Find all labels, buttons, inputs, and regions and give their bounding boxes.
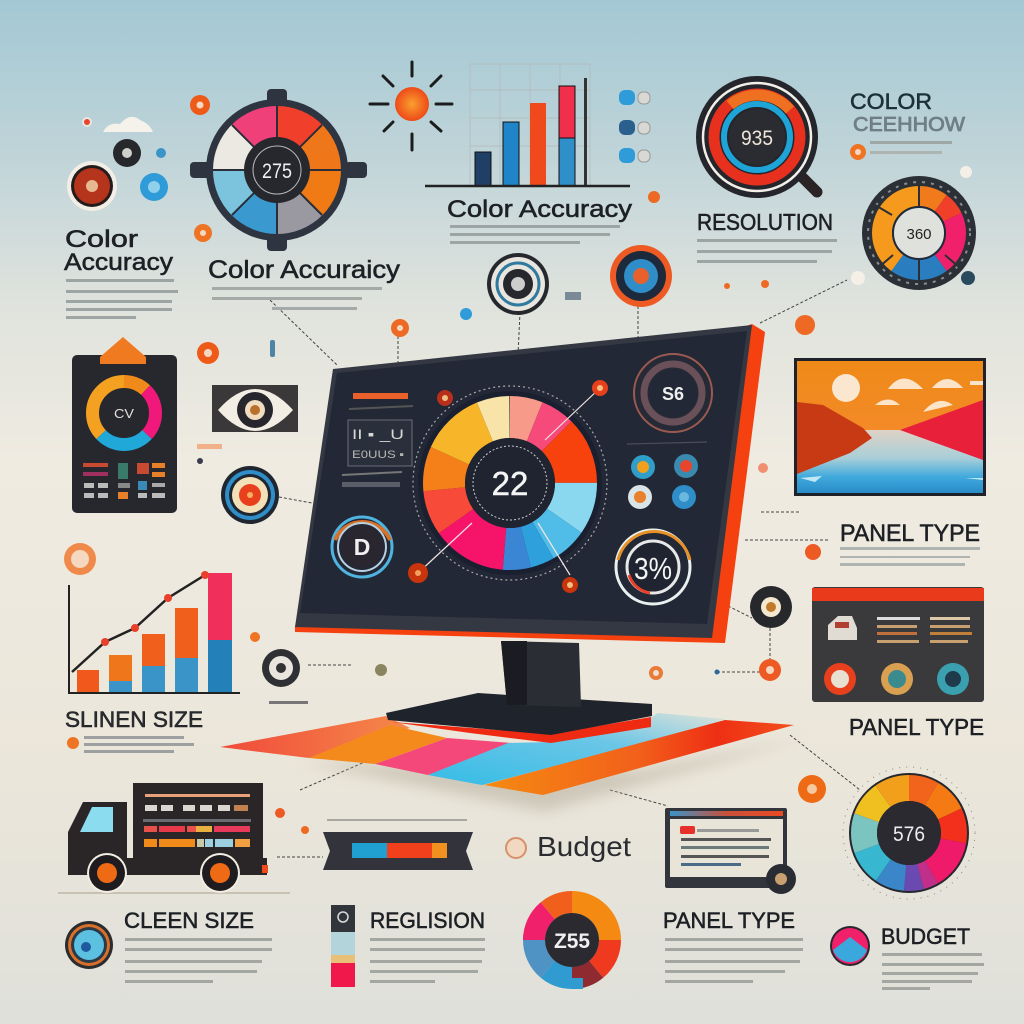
eye icon xyxy=(212,385,298,432)
heading: color accuracy left: Accuracy xyxy=(64,249,173,276)
monitor screen xyxy=(300,331,747,624)
headings top right xyxy=(850,89,965,160)
landscape card xyxy=(794,358,986,496)
cloud icon xyxy=(103,117,153,132)
caption: screen size xyxy=(67,736,194,753)
pie number: 22 xyxy=(492,465,528,502)
heading: panel type lower: PANEL TYPE xyxy=(849,714,984,740)
gauge number: S6 xyxy=(662,384,684,404)
heading: color accuracy top: Color Accuracy xyxy=(447,196,632,223)
bar chart top xyxy=(425,64,630,186)
progress banner xyxy=(275,808,473,870)
desk mat xyxy=(220,713,794,795)
headings top right: COLOR xyxy=(850,89,932,114)
monitor stand xyxy=(501,641,581,707)
small icons left of stand xyxy=(250,632,387,704)
card glyph: CV xyxy=(114,406,134,421)
donut top right xyxy=(862,176,976,290)
marker: panel type upper xyxy=(805,544,821,560)
monitor xyxy=(295,324,765,643)
small streak marks xyxy=(197,444,768,473)
monitor bezel xyxy=(295,324,765,643)
caption: resolution xyxy=(697,239,837,263)
screen gauge lower left xyxy=(332,517,392,577)
bottom donut xyxy=(534,902,610,978)
heading: budget center: Budget xyxy=(537,831,631,862)
bottom item: panel type: PANEL TYPE xyxy=(663,908,795,933)
truck icon xyxy=(58,783,290,893)
gauge wheel top left xyxy=(190,89,367,251)
small icons top left xyxy=(67,95,212,242)
donut number: 360 xyxy=(906,226,932,243)
sun icon xyxy=(370,62,452,150)
bottom item: budget: BUDGET xyxy=(881,924,970,949)
screen divider xyxy=(627,442,707,444)
wheel number: 576 xyxy=(893,823,925,846)
heading: panel type upper: PANEL TYPE xyxy=(840,520,980,547)
main pie xyxy=(413,386,607,580)
donut number: Z55 xyxy=(554,930,590,953)
screen header and table: II ▪ _U xyxy=(352,426,404,442)
small dot near wheel xyxy=(798,775,826,803)
caption: color accuracy top xyxy=(450,225,620,244)
screen header and table: E0UUS ▪ xyxy=(352,449,404,461)
monitor base xyxy=(386,693,652,743)
round icons above monitor xyxy=(197,245,815,364)
icon badge above chart xyxy=(64,543,96,575)
monitor frame xyxy=(295,325,752,638)
round icon right xyxy=(649,586,792,681)
mat shadow xyxy=(300,738,805,812)
heading: color accuracy left xyxy=(64,226,173,276)
connector lines xyxy=(270,280,860,857)
screen dots xyxy=(408,380,698,593)
bottom item: screen size xyxy=(65,908,272,983)
headings top right: CEEHHOW xyxy=(853,114,965,136)
screen gauge upper right xyxy=(634,354,712,432)
bottom item: budget xyxy=(830,924,984,990)
mini icons right of bar chart xyxy=(619,90,660,203)
color wheel bottom right xyxy=(843,767,975,899)
caption: color accuracy left xyxy=(66,279,178,319)
target gauge top right xyxy=(696,76,818,198)
heading: screen size: SLINEN SIZE xyxy=(65,707,203,732)
screen gauge lower right xyxy=(616,530,690,604)
screen card bottom xyxy=(665,808,796,894)
caption: color accuracy center xyxy=(212,287,382,310)
gauge number: 935 xyxy=(741,127,773,150)
dots near donut xyxy=(724,166,975,289)
line and bar chart left xyxy=(69,571,240,693)
caption: panel type upper xyxy=(840,547,980,566)
bottom item: resolution: REGLISION xyxy=(370,908,485,933)
bottom item: resolution xyxy=(331,905,485,987)
heading: resolution: RESOLUTION xyxy=(697,209,833,235)
dashboard card xyxy=(812,587,984,702)
target icon left xyxy=(221,466,279,524)
heading: color accuracy left: Color xyxy=(65,226,138,253)
gauge glyph: D xyxy=(354,534,370,560)
screen header and table xyxy=(342,393,413,487)
gauge number: 275 xyxy=(262,160,292,183)
clipboard card xyxy=(72,337,177,513)
gauge number: 3% xyxy=(634,551,672,586)
heading: color accuracy center: Color Accuraicy xyxy=(208,256,401,284)
bottom item: screen size: CLEEN SIZE xyxy=(124,908,254,933)
bottom item: panel type xyxy=(663,908,803,983)
